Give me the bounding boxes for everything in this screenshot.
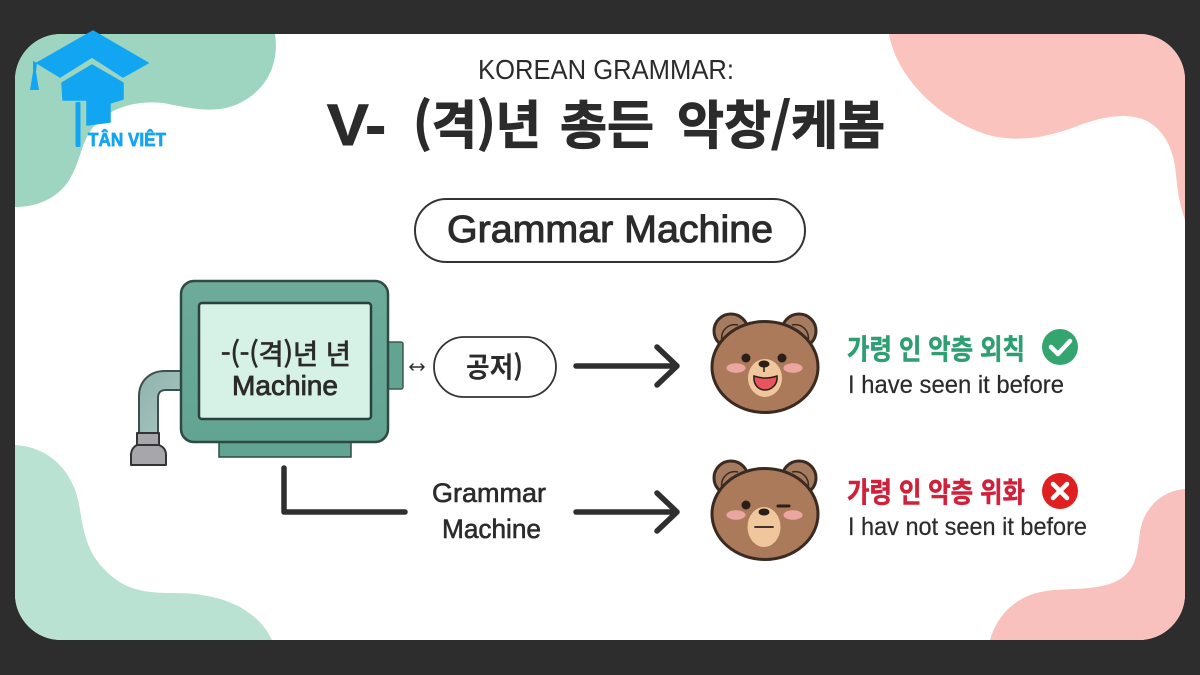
machine foot [219,440,351,457]
machine illustration [131,281,403,465]
logo bar [76,102,80,147]
title [327,84,885,159]
section pill: Grammar Machine: Grammar Machine [447,209,773,251]
text: incorrect statement: I hav not seen it before [848,513,1087,541]
blob: bottom-right pink [990,489,1185,640]
title: 악창/케봄 [677,84,885,159]
icon: unsure bear [712,461,818,560]
text: incorrect statement [847,471,1087,541]
machine label [221,333,351,401]
machine body [181,281,388,442]
machine nozzle [131,433,166,465]
machine right port [386,342,403,389]
text: correct statement: I have seen it before [848,371,1064,399]
text: correct statement: 가령 인 악층 외칙 [847,328,1025,368]
title: (격)년 [413,84,541,159]
title: V- [327,93,386,158]
section pill: Grammar Machine [415,199,805,262]
logo: Tan Viet graduation cap [30,31,166,150]
heading: Korean Grammar: KOREAN GRAMMAR: [478,54,734,85]
label: Grammar Machine: Grammar [432,478,546,508]
logo tassel [30,61,39,90]
blob: top-right pink [889,34,1185,220]
machine label: Machine [232,370,338,401]
title: 총든 [560,84,654,159]
icon: green check [1042,329,1078,365]
input pill: 공저) [466,346,523,386]
arrow: to happy bear [576,347,677,385]
blob: bottom-left mint [15,445,272,640]
machine screen [199,303,371,419]
machine pipe [139,371,181,434]
arrow: to unsure bear [576,493,677,531]
icon: red cross [1042,473,1078,509]
logo arrow [62,65,123,125]
machine label: -(-(격)년 년 [221,333,351,373]
text: correct statement [847,328,1064,399]
logo cap [37,31,148,77]
input pill [434,337,556,397]
blob: top-left teal [15,34,276,207]
arrow: elbow connector [284,468,405,512]
icon: happy bear [712,314,818,412]
label: Grammar Machine [432,478,546,544]
text: incorrect statement: 가령 인 악층 위화 [847,471,1025,511]
label: Grammar Machine: Machine [442,514,541,544]
icon: small double arrow [410,364,424,370]
logo wordmark: TÂN VIÊT [88,129,166,150]
